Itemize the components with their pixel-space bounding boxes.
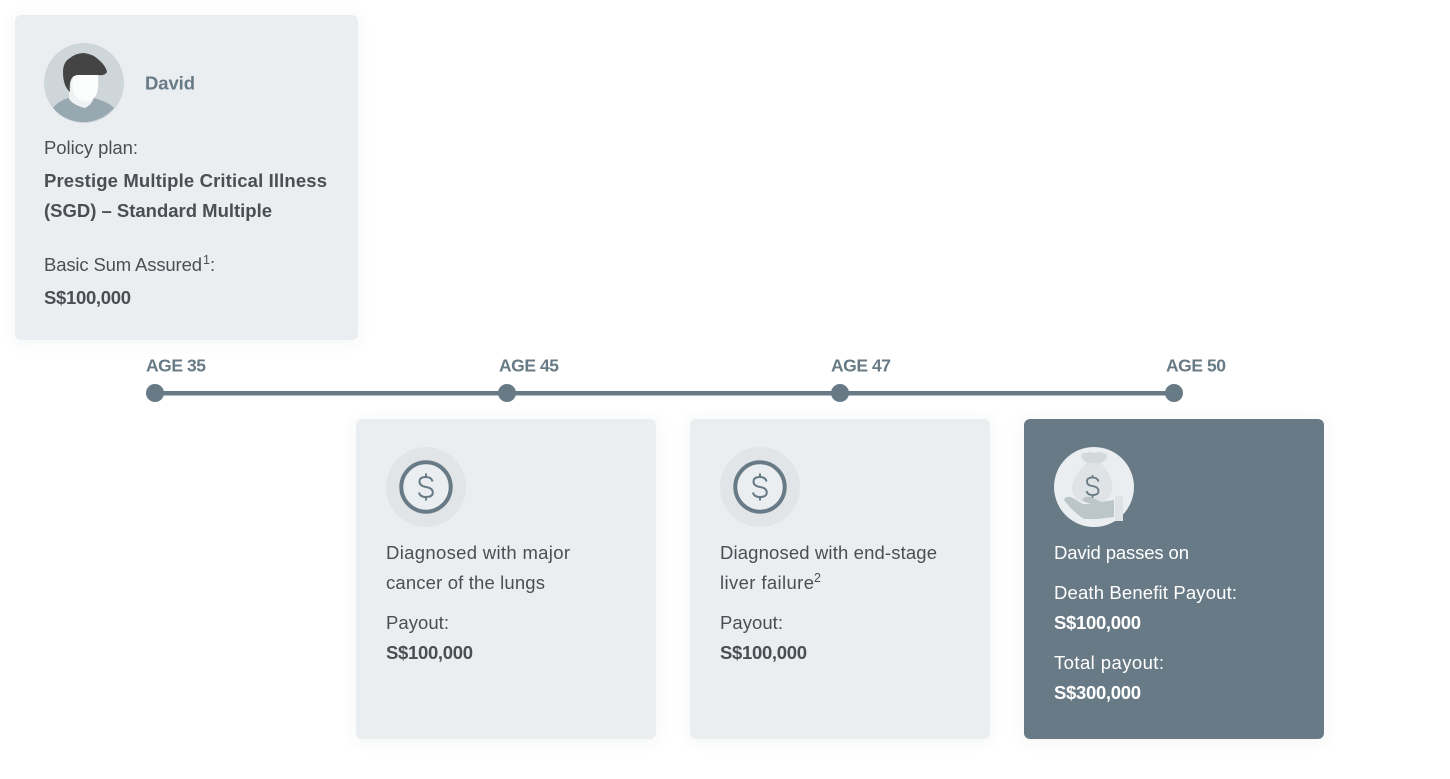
timeline — [146, 356, 1226, 402]
icon: dollar coin — [386, 447, 466, 527]
age 45 marker: AGE 45 — [499, 356, 559, 376]
text: total payout: Total payout: — [1054, 652, 1164, 673]
text: diagnosis: cancer of the lungs — [386, 572, 545, 593]
age 45 marker — [498, 356, 559, 402]
panel: age 50 death benefit — [1024, 419, 1324, 739]
text: basic sum assured: 1 — [203, 253, 210, 267]
text: basic sum assured: S$100,000 — [44, 287, 131, 308]
text: payout: S$100,000 — [386, 642, 473, 663]
text: policy plan name: Prestige Multiple Critical Illness — [44, 170, 327, 191]
age 35 marker: AGE 35 — [146, 356, 206, 376]
text: payout — [386, 612, 473, 663]
age 50 marker: AGE 50 — [1166, 356, 1226, 376]
panel: age 47 liver failure — [690, 419, 990, 739]
age 35 marker — [146, 356, 206, 402]
text: death benefit: Death Benefit Payout: — [1054, 582, 1237, 603]
text: total payout: S$300,000 — [1054, 682, 1141, 703]
age 47 marker: AGE 47 — [831, 356, 891, 376]
text: diagnosis: 2 — [814, 571, 821, 585]
icon: money bag on hand — [1054, 447, 1134, 527]
text: event: David passes on — [1054, 542, 1189, 563]
text: payout: Payout: — [386, 612, 449, 633]
text: basic sum assured: Basic Sum Assured — [44, 254, 202, 275]
age 50 marker — [1165, 356, 1226, 402]
text: policy plan name — [44, 170, 327, 221]
icon: dollar coin — [720, 447, 800, 527]
text: diagnosis: Diagnosed with major — [386, 542, 570, 563]
icon: David avatar — [44, 43, 124, 123]
panel: age 45 lung cancer — [356, 419, 656, 739]
text: payout: Payout: — [720, 612, 783, 633]
text: diagnosis — [386, 542, 570, 593]
text: total payout — [1054, 652, 1164, 703]
panel: David profile — [15, 15, 358, 340]
text: diagnosis — [720, 542, 937, 593]
name: David: David — [145, 72, 195, 94]
text: payout: S$100,000 — [720, 642, 807, 663]
age 47 marker — [831, 356, 891, 402]
text: diagnosis: Diagnosed with end-stage — [720, 542, 937, 563]
text: death benefit: S$100,000 — [1054, 612, 1141, 633]
text: diagnosis: liver failure — [720, 572, 814, 593]
text: death benefit — [1054, 582, 1237, 633]
text: policy plan name: (SGD) – Standard Multiple — [44, 200, 272, 221]
text: basic sum assured: : — [210, 254, 215, 275]
text: basic sum assured — [44, 253, 215, 308]
text: payout — [720, 612, 807, 663]
text: policy plan label: Policy plan: — [44, 137, 138, 158]
